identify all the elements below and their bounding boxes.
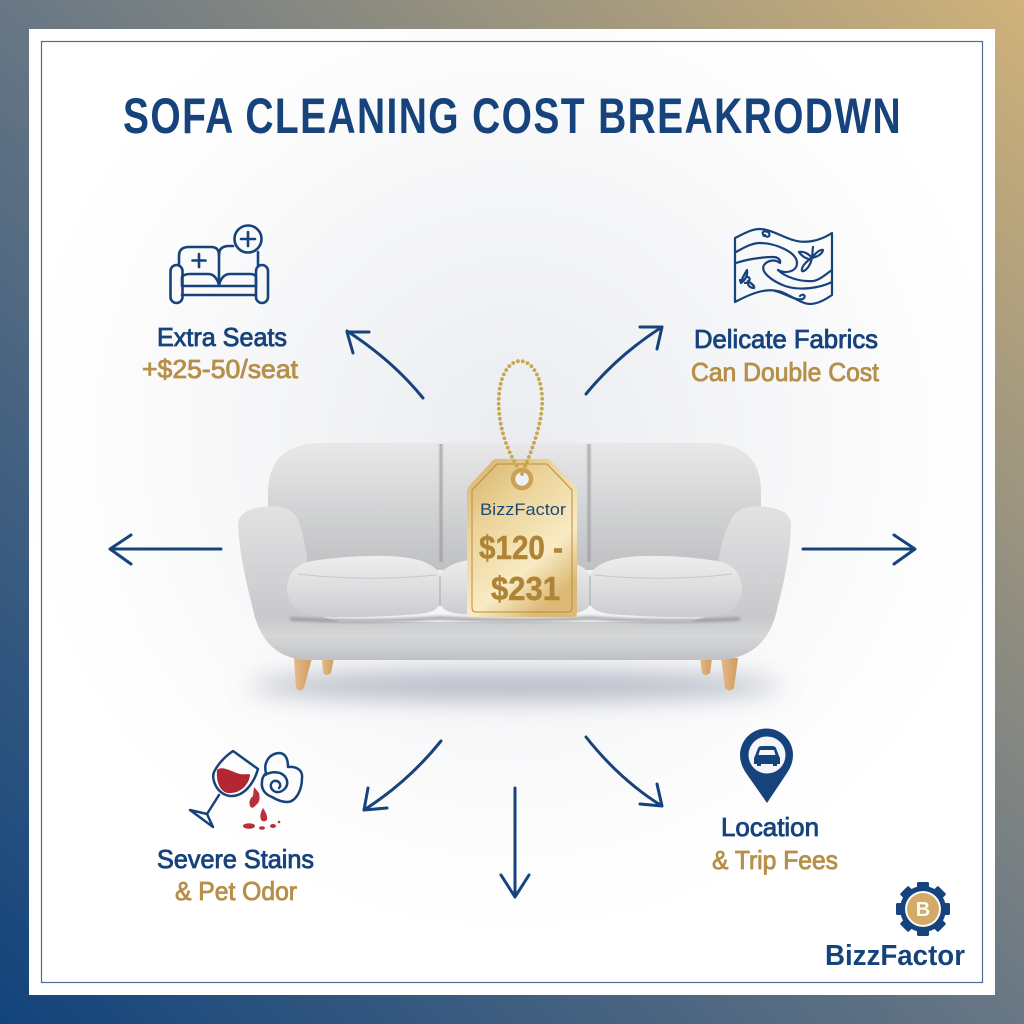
gear mark: B [916,899,930,921]
label: location: & Trip Fees [712,845,838,875]
label: extra seats: +$25-50/seat [142,354,299,384]
tag price: $120 - [479,529,563,566]
arrow: down [501,788,529,897]
tag brand: BizzFactor [480,500,566,519]
sofa body and arms [238,506,791,660]
label: delicate fabrics [691,324,880,387]
label: location: Location [721,812,819,842]
sofa back cushions [268,443,761,570]
arrow: up-right [586,327,662,394]
tag price [479,529,563,607]
label: delicate fabrics: Delicate Fabrics [694,324,878,354]
arrow: left [110,535,221,564]
tag hole [513,470,531,488]
logo: BizzFactor [825,882,965,972]
icon: location pin with car [740,728,793,803]
sofa illustration [238,443,791,700]
title: SOFA CLEANING COST BREAKRODWN [123,87,901,144]
sofa legs [294,658,738,690]
floor shadow [250,672,780,700]
arrow: up-left [347,331,423,398]
seat cushions [287,556,742,621]
label: severe stains: Severe Stains [157,844,314,874]
label: extra seats: Extra Seats [157,322,287,352]
icon: wine glass and odor cloud [190,751,302,830]
price tag [467,361,577,617]
label: delicate fabrics: Can Double Cost [691,357,880,387]
tag price: $231 [491,570,560,607]
label: location [712,812,838,875]
wordmark: BizzFactor [825,940,965,972]
arrow: down-right [586,737,662,806]
icon: sofa with plus [170,226,268,303]
icon: delicate fabric [735,229,832,304]
label: severe stains: & Pet Odor [175,876,297,906]
label: severe stains [157,844,314,906]
tag body [467,459,577,617]
arrow: down-left [364,741,441,810]
label: extra seats [142,322,299,384]
arrow: right [803,535,915,564]
ball chain [499,361,542,474]
